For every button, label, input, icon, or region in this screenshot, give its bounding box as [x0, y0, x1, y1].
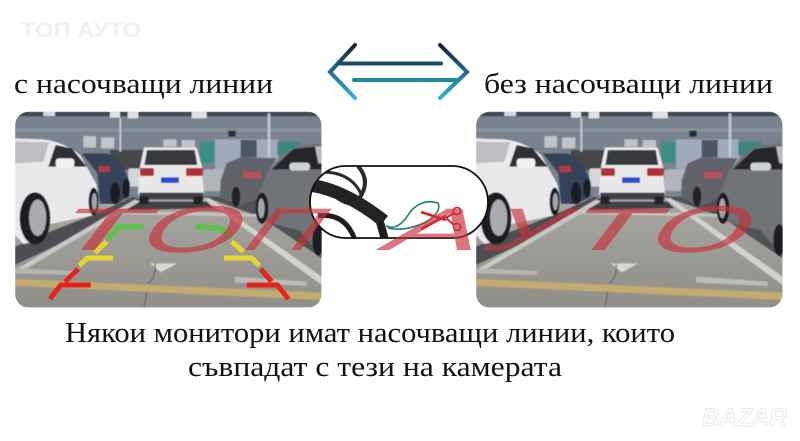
arrow: double-headed comparison	[330, 45, 467, 98]
guide lines overlay	[50, 227, 288, 299]
caption: Някои монитори имат насочващи линии, които	[65, 318, 675, 349]
diagonal red watermark: О	[121, 193, 270, 266]
icon: scissors	[421, 207, 461, 231]
channel watermark: ТОП АУТО	[21, 19, 141, 42]
heading: without guide lines: без насочващи линии	[484, 69, 773, 100]
photo: parking without guide lines	[476, 112, 785, 308]
photo: parking with guide lines	[15, 112, 324, 308]
diagonal red watermark: О	[630, 193, 779, 266]
diagonal red watermark	[34, 193, 779, 266]
diagonal red watermark: Т	[544, 196, 683, 263]
centre oval: camera cable	[310, 166, 488, 240]
diagonal red watermark: А	[365, 196, 512, 263]
heading: with guide lines: с насочващи линии	[14, 69, 273, 100]
diagonal red watermark: Т	[34, 196, 173, 263]
caption: съвпадат с тези на камерата	[188, 352, 563, 383]
logo: Bazar: BAZAR	[702, 404, 787, 432]
diagonal red watermark: У	[466, 197, 590, 263]
caption	[65, 318, 675, 383]
diagonal red watermark: П	[227, 195, 350, 263]
